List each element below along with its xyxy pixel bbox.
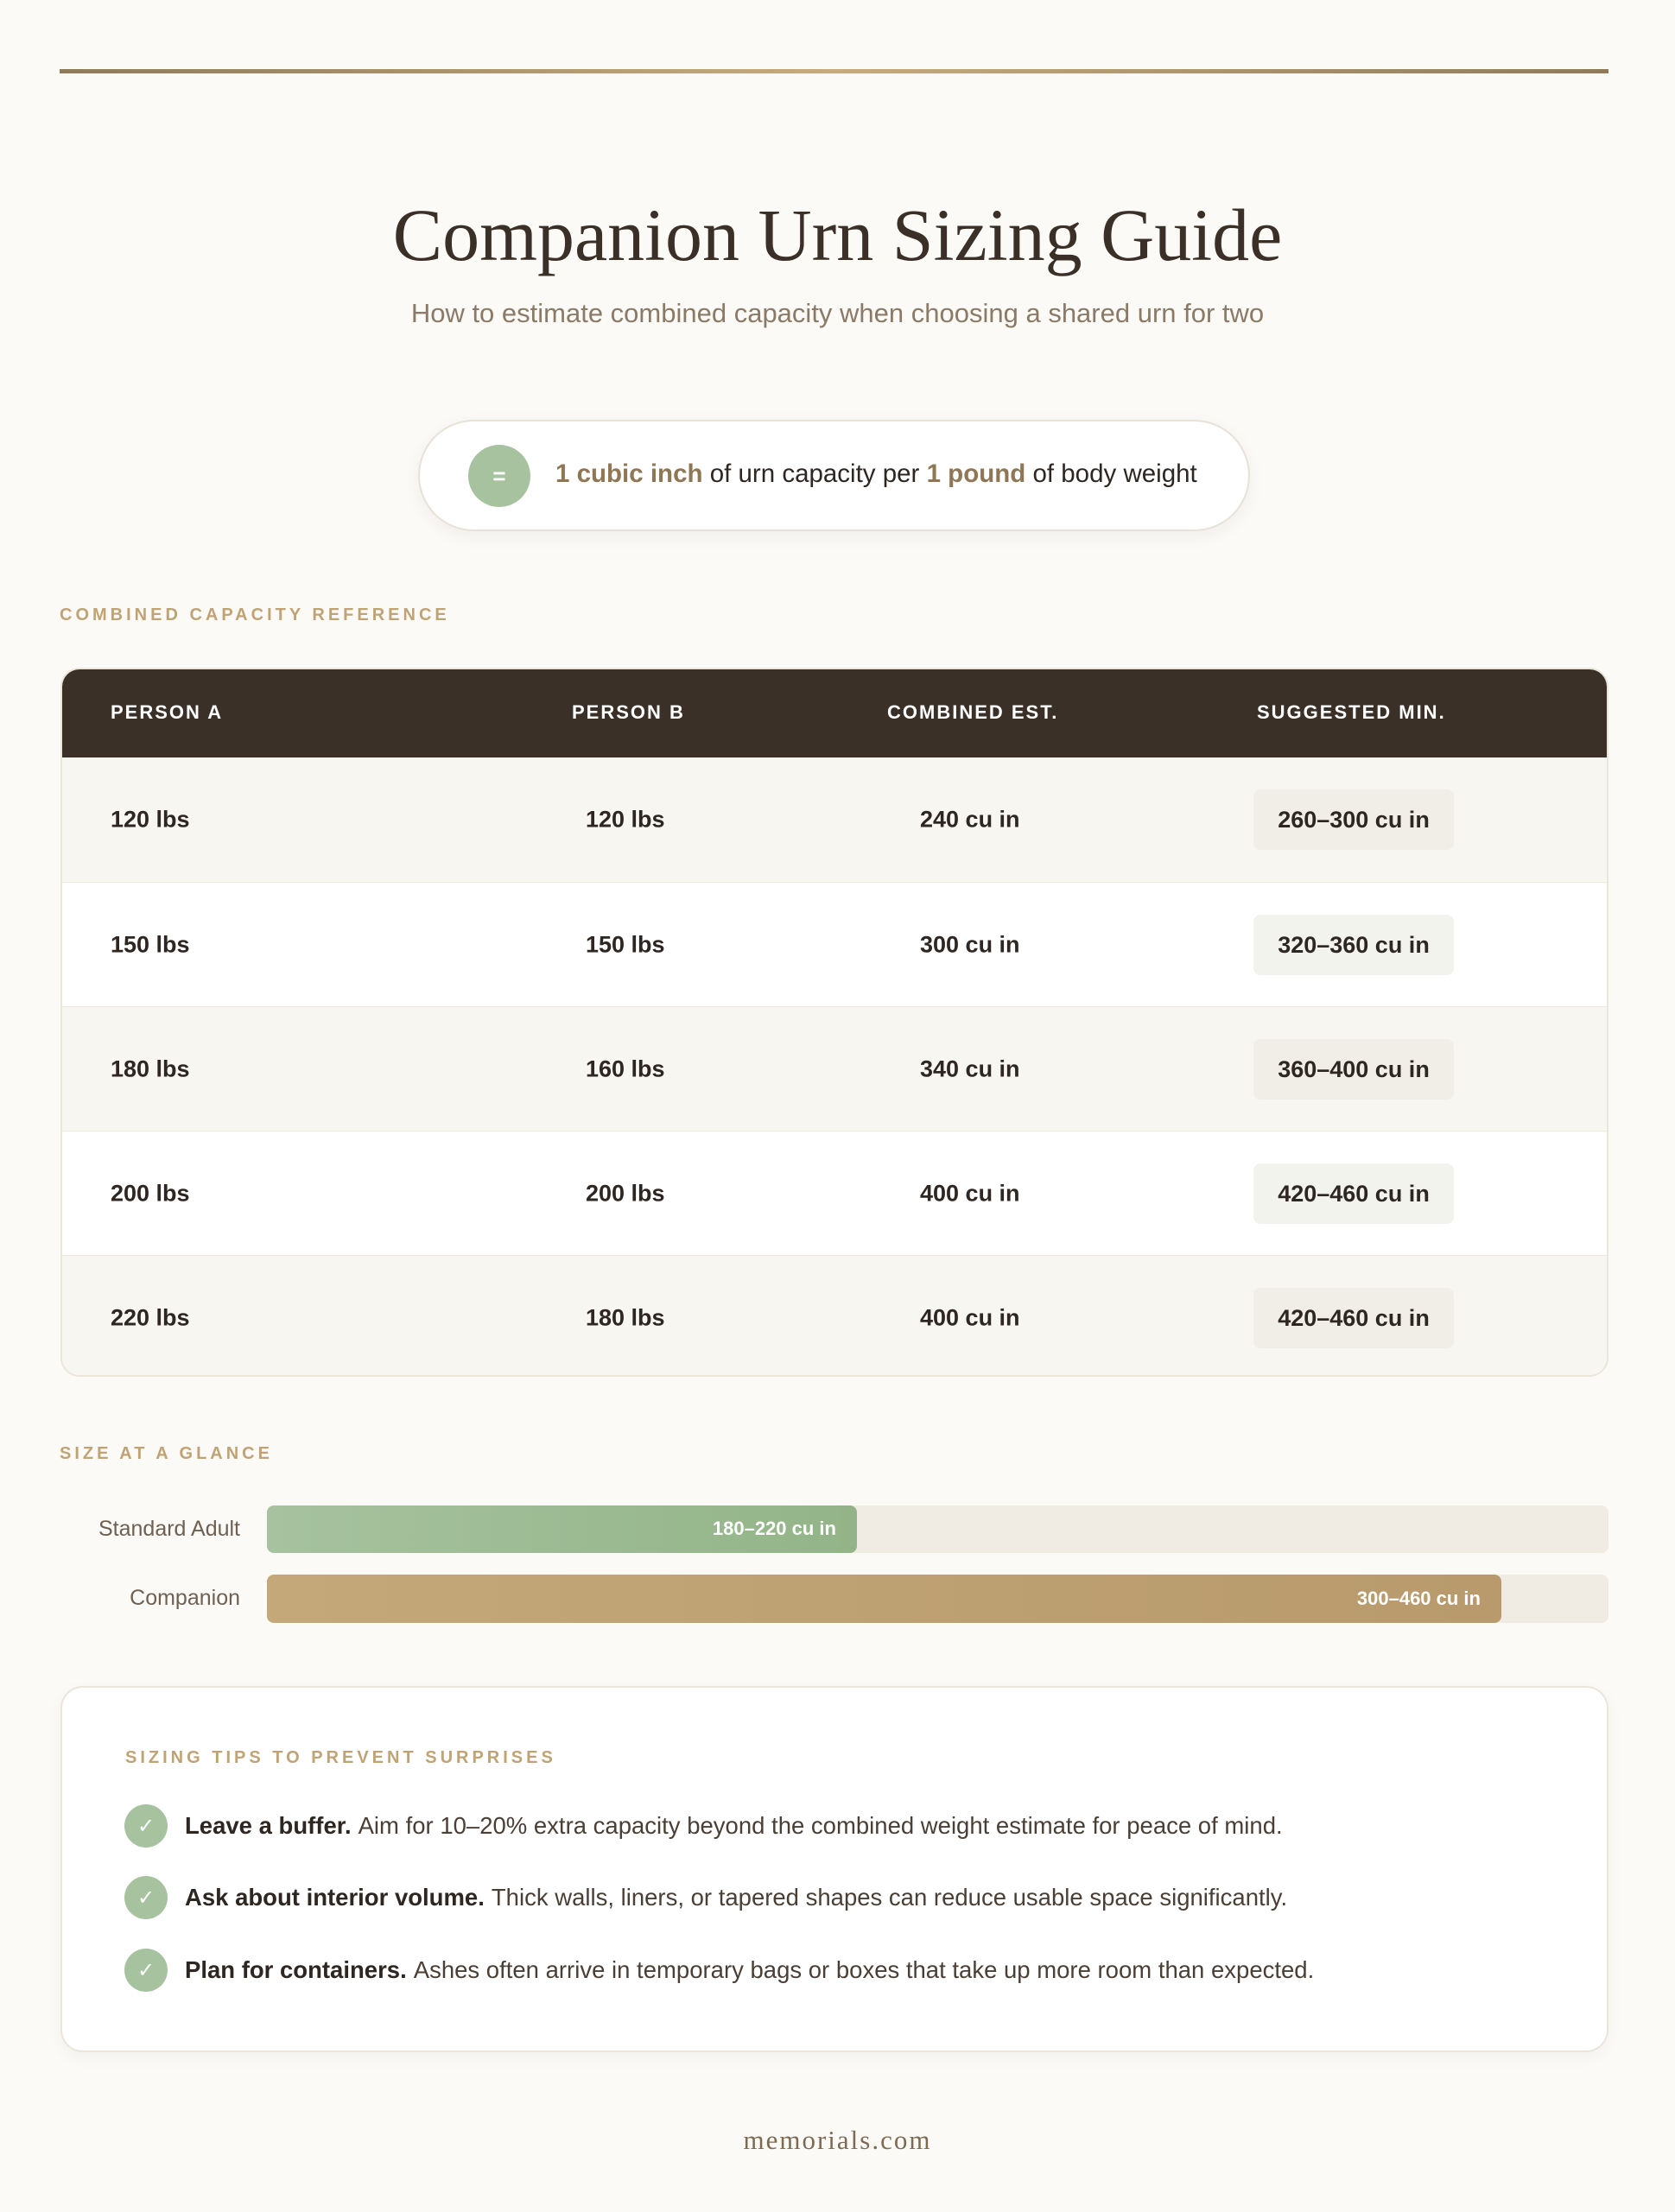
tip 2: Ask about interior volume. (185, 1884, 485, 1911)
icon: equals circle: = (492, 463, 506, 489)
subtitle: How to estimate combined capacity when choosing a shared urn for two (411, 298, 1264, 328)
tip 3 (124, 1949, 1314, 1992)
panel: sizing tips (60, 1686, 1608, 2052)
row 4: 200 lbs (586, 1180, 665, 1206)
row 4: 400 cu in (920, 1180, 1020, 1206)
row 5: 400 cu in (920, 1304, 1020, 1330)
table header (62, 669, 1610, 757)
section label: size at a glance: SIZE AT A GLANCE (60, 1444, 273, 1463)
row 2: 150 lbs (111, 931, 190, 957)
row 2: 320–360 cu in (1278, 931, 1430, 957)
row 3 (62, 1006, 1610, 1131)
row 5: 220 lbs (111, 1304, 190, 1330)
tip 1: Aim for 10–20% extra capacity beyond the combined weight estimate for peace of mind. (358, 1812, 1283, 1839)
tips heading: SIZING TIPS TO PREVENT SURPRISES (125, 1748, 556, 1767)
section label: combined capacity: COMBINED CAPACITY REFERENCE (60, 605, 450, 624)
row 1: 120 lbs (111, 807, 190, 833)
tip 3: ✓ (137, 1959, 155, 1981)
row 5: 420–460 cu in (1278, 1304, 1430, 1330)
title: Companion Urn Sizing Guide (393, 193, 1282, 276)
bar: companion (130, 1575, 1608, 1623)
tip 3: Plan for containers. (185, 1956, 407, 1983)
bar: standard adult (98, 1505, 1608, 1553)
row 1: 120 lbs (586, 807, 665, 833)
row 2: 150 lbs (586, 931, 665, 957)
table header: PERSON B (572, 701, 685, 723)
row 4 (62, 1131, 1610, 1255)
row 1: 260–300 cu in (1278, 807, 1430, 833)
row 5 (62, 1255, 1610, 1379)
row 4: 420–460 cu in (1278, 1180, 1430, 1206)
table header: PERSON A (111, 701, 223, 723)
bar: companion: Companion (130, 1586, 240, 1610)
tip 1: Leave a buffer. (185, 1812, 352, 1839)
row 2: 300 cu in (920, 931, 1020, 957)
row 3: 180 lbs (111, 1055, 190, 1081)
row 5: 180 lbs (586, 1304, 665, 1330)
tip 2: Thick walls, liners, or tapered shapes can reduce usable space significantly. (492, 1884, 1287, 1911)
bar: standard adult: 180–220 cu in (713, 1518, 836, 1539)
footer: memorials.com (743, 2125, 931, 2155)
tip 1 (124, 1804, 1283, 1848)
tip 3: Ashes often arrive in temporary bags or boxes that take up more room than expected. (414, 1956, 1314, 1983)
table header: SUGGESTED MIN. (1257, 701, 1446, 723)
icon: equals circle (468, 445, 530, 507)
tip 1: ✓ (137, 1814, 155, 1838)
row 4: 200 lbs (111, 1180, 190, 1206)
row 2 (62, 882, 1610, 1006)
table header: COMBINED EST. (887, 701, 1058, 723)
tip 2: ✓ (137, 1886, 155, 1909)
bar chart (98, 1505, 1608, 1623)
bar: standard adult: Standard Adult (98, 1517, 240, 1541)
formula text: 1 cubic inch of urn capacity per 1 pound of body weight (555, 460, 1197, 488)
row 1 (62, 757, 1610, 882)
row 3: 160 lbs (586, 1055, 665, 1081)
row 3: 360–400 cu in (1278, 1055, 1430, 1081)
bar: companion: 300–460 cu in (1357, 1588, 1481, 1609)
top rule (60, 69, 1608, 73)
table (60, 668, 1608, 1377)
formula pill (418, 420, 1250, 531)
row 3: 340 cu in (920, 1055, 1020, 1081)
tip 2 (124, 1876, 1287, 1919)
row 1: 240 cu in (920, 807, 1020, 833)
